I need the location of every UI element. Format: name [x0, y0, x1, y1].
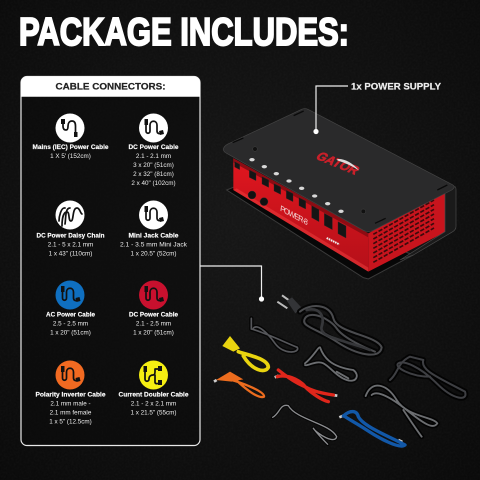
item: dc power cable: DC Power Cable	[128, 144, 179, 151]
item: mini jack cable: Mini Jack Cable	[128, 232, 179, 239]
item: polarity inverter cable	[36, 360, 106, 426]
cables group	[214, 295, 465, 446]
gator logo	[313, 150, 362, 178]
panel heading	[21, 76, 200, 97]
ports	[235, 162, 346, 238]
item: current doubler cable	[118, 360, 189, 417]
cable: gray bottom	[273, 405, 337, 444]
item: ac power cable: 2.5 - 2.5 mm	[53, 321, 88, 328]
cable: yellow	[222, 336, 268, 370]
item: dc power cable red	[129, 280, 178, 337]
cable: gray middle	[305, 347, 357, 381]
item: ac power cable: 1 x 20" (51cm)	[50, 330, 91, 337]
item: dc power cable red: 2.1 - 2.5 mm	[136, 321, 171, 328]
item: dc power cable	[128, 114, 179, 187]
item: dc power daisy chain: 1 x 43" (110cm)	[49, 250, 92, 257]
item: dc power cable: 3 x 20" (51cm)	[133, 162, 174, 169]
item: dc power cable red: DC Power Cable	[129, 311, 178, 318]
title: PACKAGE INCLUDES:	[19, 11, 349, 54]
panel heading: CABLE CONNECTORS:	[56, 81, 166, 91]
item: polarity inverter cable: 2.1 mm male -	[50, 401, 91, 408]
callout: cables	[200, 266, 264, 302]
power supply	[223, 109, 456, 279]
item: dc power daisy chain	[36, 200, 105, 257]
item: polarity inverter cable: 2.1 mm female	[50, 410, 92, 417]
plate screws	[253, 147, 366, 214]
item: mini jack cable: 1 x 20.5" (52cm)	[131, 250, 176, 257]
plate slots	[233, 111, 447, 223]
item: mini jack cable: 2.1 - 3.5 mm Mini Jack	[120, 241, 188, 248]
model name: POWER-8	[280, 204, 309, 228]
callout: power supply	[313, 82, 442, 134]
item: current doubler cable: Current Doubler Cable	[118, 391, 189, 398]
item: polarity inverter cable: Polarity Inverter Cable	[36, 391, 106, 398]
plate indicators	[249, 158, 344, 213]
cable: orange	[214, 372, 264, 397]
item: ac power cable	[46, 280, 95, 337]
base plate	[227, 187, 413, 279]
right red side	[368, 190, 446, 272]
knobs	[248, 191, 268, 206]
item: ac power cable: AC Power Cable	[46, 311, 95, 318]
cable: gray right	[366, 386, 437, 437]
cable: black small	[251, 318, 298, 352]
right end bracket	[400, 187, 456, 260]
cable: black right	[390, 357, 465, 398]
cable: red	[275, 370, 337, 402]
item: polarity inverter cable: 1 x 5" (12.5cm)	[49, 419, 92, 426]
item: dc power cable: 2 x 32" (81cm)	[133, 171, 174, 178]
item: current doubler cable: 2.1 - 2 x 2.1 mm	[131, 401, 176, 408]
item: mains power cable: 1 X 5' (152cm)	[50, 153, 91, 160]
item: dc power cable: 2 x 40" (102cm)	[131, 180, 176, 187]
indicator lights	[327, 238, 339, 244]
item: current doubler cable: 1 x 21.5" (55cm)	[131, 410, 176, 417]
item: mains power cable	[32, 114, 109, 160]
front red side	[233, 158, 368, 272]
item: dc power daisy chain: 2.1 - 5 x 2.1 mm	[48, 241, 93, 248]
cable: blue	[339, 412, 405, 446]
cable: mains	[277, 295, 382, 355]
louvres	[373, 200, 434, 262]
gator logo: GATOR	[313, 150, 362, 178]
item: dc power cable: 2.1 - 2.1 mm	[136, 153, 171, 160]
item: mains power cable: Mains (IEC) Power Cable	[32, 144, 109, 151]
panel: cable connectors	[21, 76, 200, 446]
callout: power supply: 1x POWER SUPPLY	[351, 82, 442, 92]
top plate	[223, 109, 454, 232]
item: dc power daisy chain: DC Power Daisy Chain	[36, 232, 105, 239]
item: dc power cable red: 1 x 20" (51cm)	[133, 330, 174, 337]
item: mini jack cable	[120, 200, 188, 257]
